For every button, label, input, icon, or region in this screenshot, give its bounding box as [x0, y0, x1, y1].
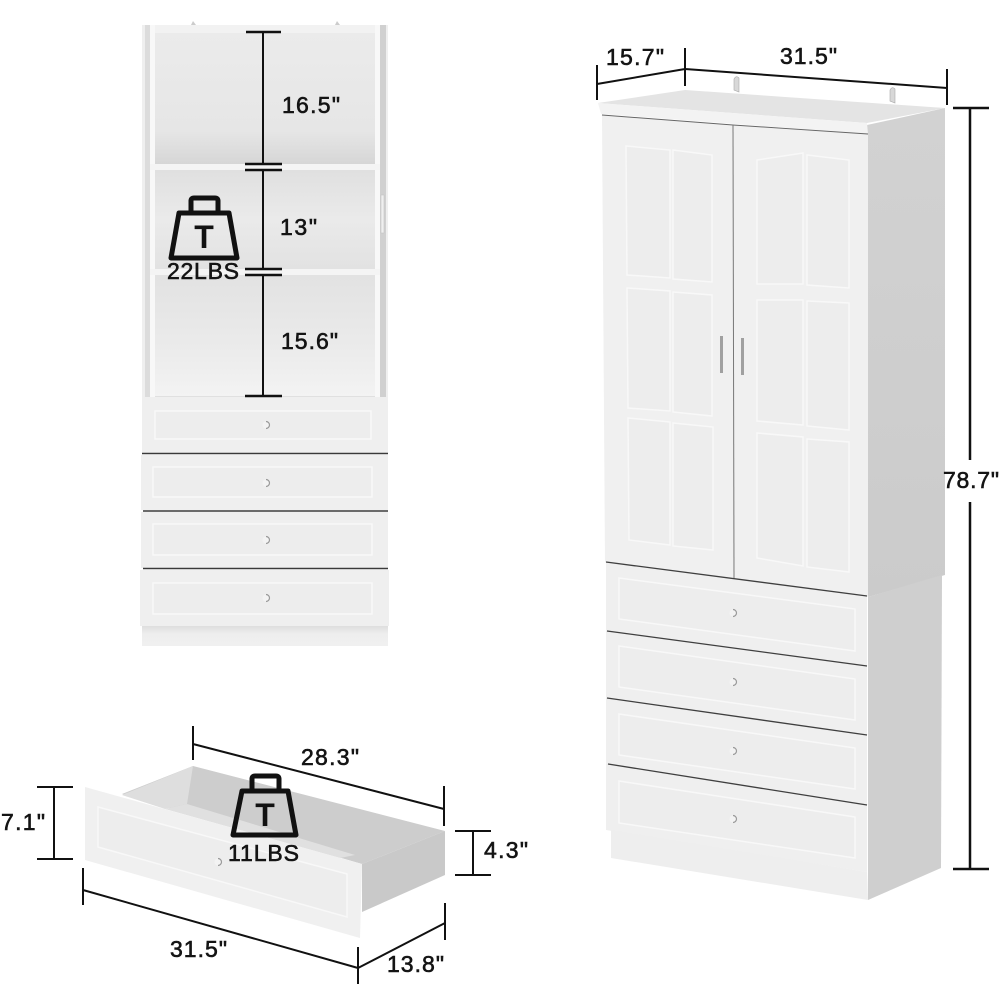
- drawer floor: [165, 804, 355, 858]
- panel: closed wardrobe: [598, 77, 945, 900]
- label: 15.7: 15.7": [606, 44, 664, 70]
- label: 28.3: 28.3": [301, 744, 359, 770]
- dimension: wardrobe width, depth, height: [597, 48, 989, 869]
- drawers: [606, 562, 867, 872]
- label: 11LBS: 11LBS: [228, 840, 299, 866]
- icon: weight 22 lbs: [171, 198, 237, 258]
- label: 22LBS: 22LBS: [167, 258, 239, 284]
- drawer left wall: [122, 766, 193, 809]
- label: 4.3: 4.3": [484, 837, 528, 863]
- label: 13.8: 13.8": [387, 951, 444, 977]
- icon: weight 11 lbs: [233, 776, 296, 835]
- label: 7.1: 7.1": [1, 809, 45, 835]
- drawers: [140, 397, 389, 626]
- icon: weight 11 lbs: T: [255, 797, 275, 833]
- panel: open cabinet front view: [140, 21, 389, 646]
- wardrobe top: [598, 90, 945, 123]
- label: 31.5 top: 31.5": [780, 43, 837, 69]
- doors: [602, 115, 734, 578]
- label: 13: 13": [280, 214, 317, 240]
- wardrobe side: [867, 108, 945, 597]
- wall brackets: [734, 77, 895, 103]
- dimension: drawer: [37, 726, 491, 984]
- icon: weight 22 lbs: T: [194, 219, 214, 255]
- label: 31.5 bottom: 31.5": [170, 936, 227, 962]
- dimension: shelf heights: [245, 32, 282, 396]
- label: 16.5: 16.5": [282, 92, 340, 118]
- label: 78.7: 78.7": [943, 467, 999, 493]
- drawer side: [362, 831, 445, 912]
- label: 15.6: 15.6": [281, 328, 338, 354]
- drawer front: [85, 787, 362, 938]
- panel: open drawer: [85, 766, 445, 938]
- drawer back wall: [122, 766, 445, 864]
